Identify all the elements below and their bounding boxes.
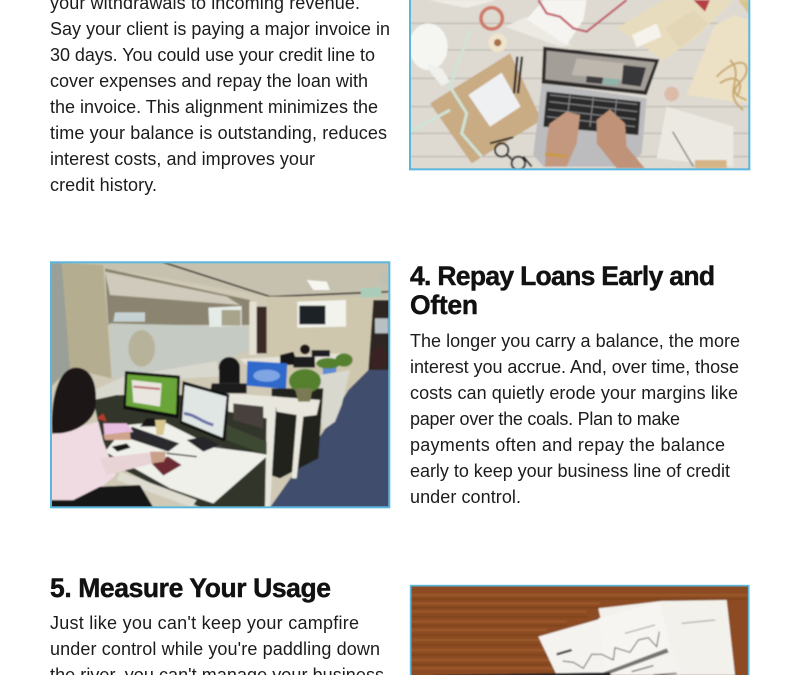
text block: section 3 body: cover expenses and repay the loan with bbox=[50, 71, 368, 91]
text block: section 5 body bbox=[50, 613, 384, 675]
text block: section 3 body: interest costs, and improves your bbox=[50, 149, 315, 169]
text block: section 3 body: 30 days. You could use your credit line to bbox=[50, 45, 375, 65]
photo: office workers at computer desks bbox=[51, 262, 389, 507]
text block: section 3 body: Say your client is paying a major invoice in bbox=[50, 19, 390, 39]
heading: section 4 bbox=[410, 261, 715, 320]
text block: section 4 body: costs can quietly erode your margins like bbox=[410, 383, 738, 403]
text block: section 5 body: under control while you're paddling down bbox=[50, 639, 380, 659]
text block: section 4 body: The longer you carry a balance, the more bbox=[410, 331, 740, 351]
text block: section 4 body: early to keep your business line of credit bbox=[410, 461, 730, 481]
text block: section 3 body: credit history. bbox=[50, 175, 157, 195]
heading: section 4: 4. Repay Loans Early and bbox=[410, 261, 715, 291]
text block: section 4 body: under control. bbox=[410, 487, 521, 507]
photo: laptop on a rustic desk bbox=[409, 0, 749, 170]
text block: section 4 body: payments often and repay the balance bbox=[410, 435, 725, 455]
photo: printed charts on a wooden desk bbox=[410, 585, 749, 675]
text block: section 4 body: interest you accrue. And, over time, those bbox=[410, 357, 739, 377]
text block: section 4 body bbox=[410, 331, 740, 507]
heading: section 4: Often bbox=[410, 290, 478, 320]
text block: section 3 body: time your balance is outstanding, reduces bbox=[50, 123, 387, 143]
heading: section 5: 5. Measure Your Usage bbox=[50, 573, 331, 603]
text block: section 4 body: paper over the coals. Plan to make bbox=[410, 409, 680, 429]
text block: section 3 body: the invoice. This alignment minimizes the bbox=[50, 97, 378, 117]
text block: section 3 body bbox=[50, 0, 390, 195]
text block: section 5 body: Just like you can't keep your campfire bbox=[50, 613, 359, 633]
